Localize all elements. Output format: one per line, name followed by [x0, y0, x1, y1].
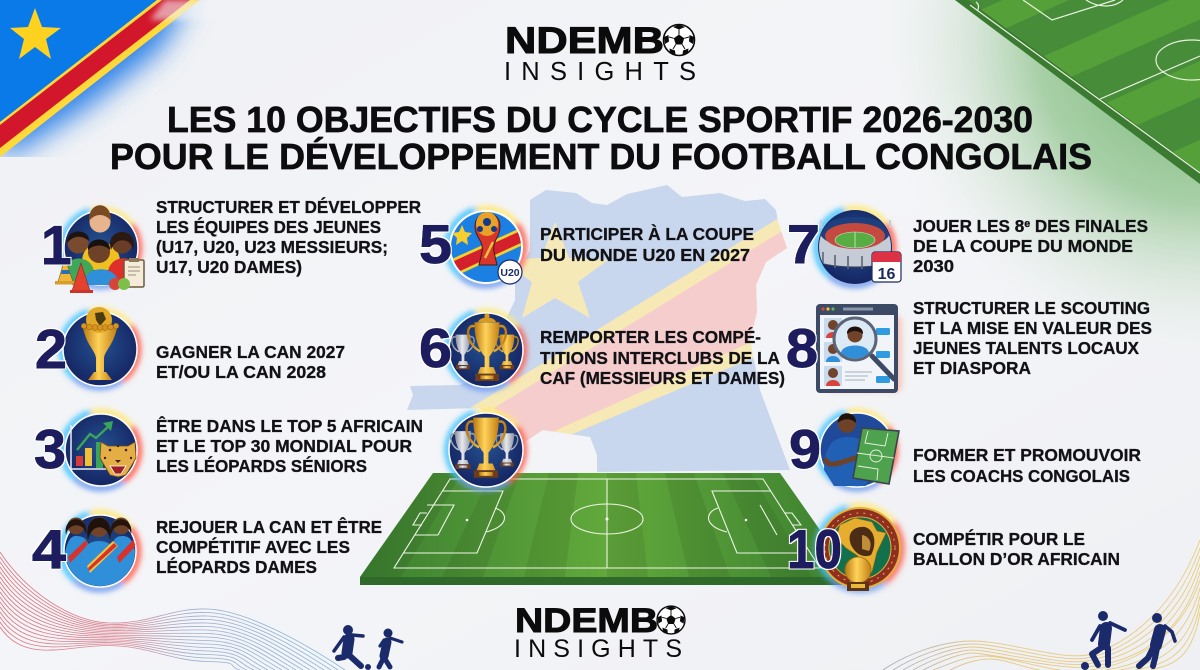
icon: trophies above the pitch: [447, 412, 524, 488]
icon: women's team: [61, 513, 138, 600]
number 4: 4: [32, 518, 66, 580]
text 4: [156, 516, 382, 577]
icon: U20 world cup: [445, 209, 525, 285]
text 8: STRUCTURER LE SCOUTING: [913, 298, 1150, 318]
text 3: [156, 415, 423, 476]
title: LES 10 OBJECTIFS DU CYCLE SPORTIF 2026-2030: [167, 99, 1033, 140]
icon: youth team: [55, 205, 144, 293]
objective 6: [419, 312, 785, 388]
text 7: DE LA COUPE DU MONDE: [913, 236, 1133, 256]
map: DRC with flag colours: [400, 180, 800, 475]
text 4: LÉOPARDS DAMES: [156, 556, 317, 577]
logo: bottom: NDEMB: [515, 602, 658, 640]
text 5: PARTICIPER À LA COUPE: [540, 223, 754, 244]
objective 1: [41, 196, 421, 293]
text 1: LES ÉQUIPES DES JEUNES: [156, 216, 381, 237]
text 4: COMPÉTITIF AVEC LES: [156, 536, 350, 557]
silhouettes: players bottom left: [334, 625, 402, 670]
number 10: 10: [787, 518, 842, 580]
icon: calendar: 16: [878, 266, 896, 283]
icon: ranking chart and leopard: [62, 412, 139, 488]
logo: top: [504, 20, 696, 86]
icon: clipboard and apples: [109, 258, 144, 290]
icon: magnifier: [834, 318, 876, 360]
number 9: 9: [789, 418, 821, 480]
icon: leopard head: [100, 442, 136, 477]
text 9: FORMER ET PROMOUVOIR: [913, 445, 1141, 465]
icon: world cup trophy: [475, 212, 500, 265]
badge: U20: U20: [500, 267, 520, 279]
objective 7: [787, 209, 1148, 285]
corner: DRC flag: [0, 0, 202, 157]
silhouettes: players bottom right: [1081, 611, 1175, 670]
text 10: COMPÉTIR POUR LE: [913, 528, 1085, 549]
text 7: [913, 216, 1148, 276]
text 5: DU MONDE U20 EN 2027: [540, 245, 750, 265]
text 4: REJOUER LA CAN ET ÊTRE: [156, 516, 382, 537]
text 2: [156, 342, 345, 382]
icon: coach with tactics board: [818, 412, 899, 488]
title: POUR LE DÉVELOPPEMENT DU FOOTBALL CONGOLAIS: [110, 136, 1092, 177]
text 2: ET/OU LA CAN 2028: [156, 362, 326, 382]
number 6: 6: [419, 317, 452, 379]
corner: green glow and top-right pitch: [922, 0, 1200, 316]
text 2: GAGNER LA CAN 2027: [156, 342, 345, 362]
icon: interclub trophies: [447, 312, 524, 388]
number 5: 5: [419, 213, 452, 275]
logo: top: INSIGHTS: [504, 58, 696, 86]
text 3: ÊTRE DANS LE TOP 5 AFRICAIN: [156, 415, 423, 436]
text 7: DES FINALES: [1030, 216, 1148, 236]
text 7: 2030: [913, 256, 954, 276]
text 1: U17, U20 DAMES): [156, 257, 302, 277]
objective 5: [419, 209, 754, 285]
objective 10: [787, 507, 1120, 591]
number 1: 1: [41, 214, 72, 276]
text 6: [540, 326, 785, 388]
number 3: 3: [34, 418, 66, 480]
objective 8: [786, 298, 1152, 393]
icon: yellow star: [10, 8, 61, 59]
text 6: REMPORTER LES COMPÉ-: [540, 326, 761, 347]
icon: tactics board: [853, 428, 899, 484]
text 5: [540, 223, 754, 265]
objective 3: [34, 412, 423, 488]
text 7: e: [1024, 218, 1030, 230]
objective 9: [789, 412, 1141, 488]
text 3: LES LÉOPARDS SÉNIORS: [156, 455, 367, 476]
text 6: CAF (MESSIEURS ET DAMES): [540, 368, 785, 388]
pitch: centre football field: [360, 473, 853, 585]
objective 2: [35, 307, 345, 387]
text 10: [913, 528, 1120, 569]
logo: bottom: [514, 602, 685, 663]
objective 4: [32, 513, 382, 600]
text 3: ET LE TOP 30 MONDIAL POUR: [156, 436, 412, 456]
text 1: (U17, U20, U23 MESSIEURS;: [156, 237, 388, 257]
number 8: 8: [786, 317, 818, 379]
text 10: BALLON D’OR AFRICAIN: [913, 549, 1120, 569]
text 9: LES COACHS CONGOLAIS: [913, 466, 1130, 486]
number 7: 7: [787, 213, 820, 275]
text 8: ET DIASPORA: [913, 358, 1031, 378]
text 9: [913, 445, 1141, 486]
number 2: 2: [35, 318, 67, 380]
icon: stadium and calendar: [815, 209, 901, 285]
text 1: [156, 196, 421, 277]
icon: cones: [55, 258, 93, 293]
text 8: JEUNES TALENTS LOCAUX: [913, 338, 1139, 358]
decorative waves: [0, 552, 345, 670]
text 8: [913, 298, 1152, 378]
icon: scouting browser: [816, 304, 902, 393]
title: [110, 99, 1092, 177]
logo: bottom: INSIGHTS: [514, 635, 682, 663]
logo: top: NDEMB: [505, 20, 664, 61]
icon: African Ballon d'Or: [818, 507, 901, 591]
text 1: STRUCTURER ET DÉVELOPPER: [156, 196, 421, 217]
text 6: TITIONS INTERCLUBS DE LA: [540, 348, 780, 368]
icon: golden ball: [845, 557, 871, 591]
text 7: JOUER LES 8: [913, 216, 1027, 236]
text 8: ET LA MISE EN VALEUR DES: [913, 318, 1152, 338]
icon: CAN trophy: [61, 307, 138, 387]
